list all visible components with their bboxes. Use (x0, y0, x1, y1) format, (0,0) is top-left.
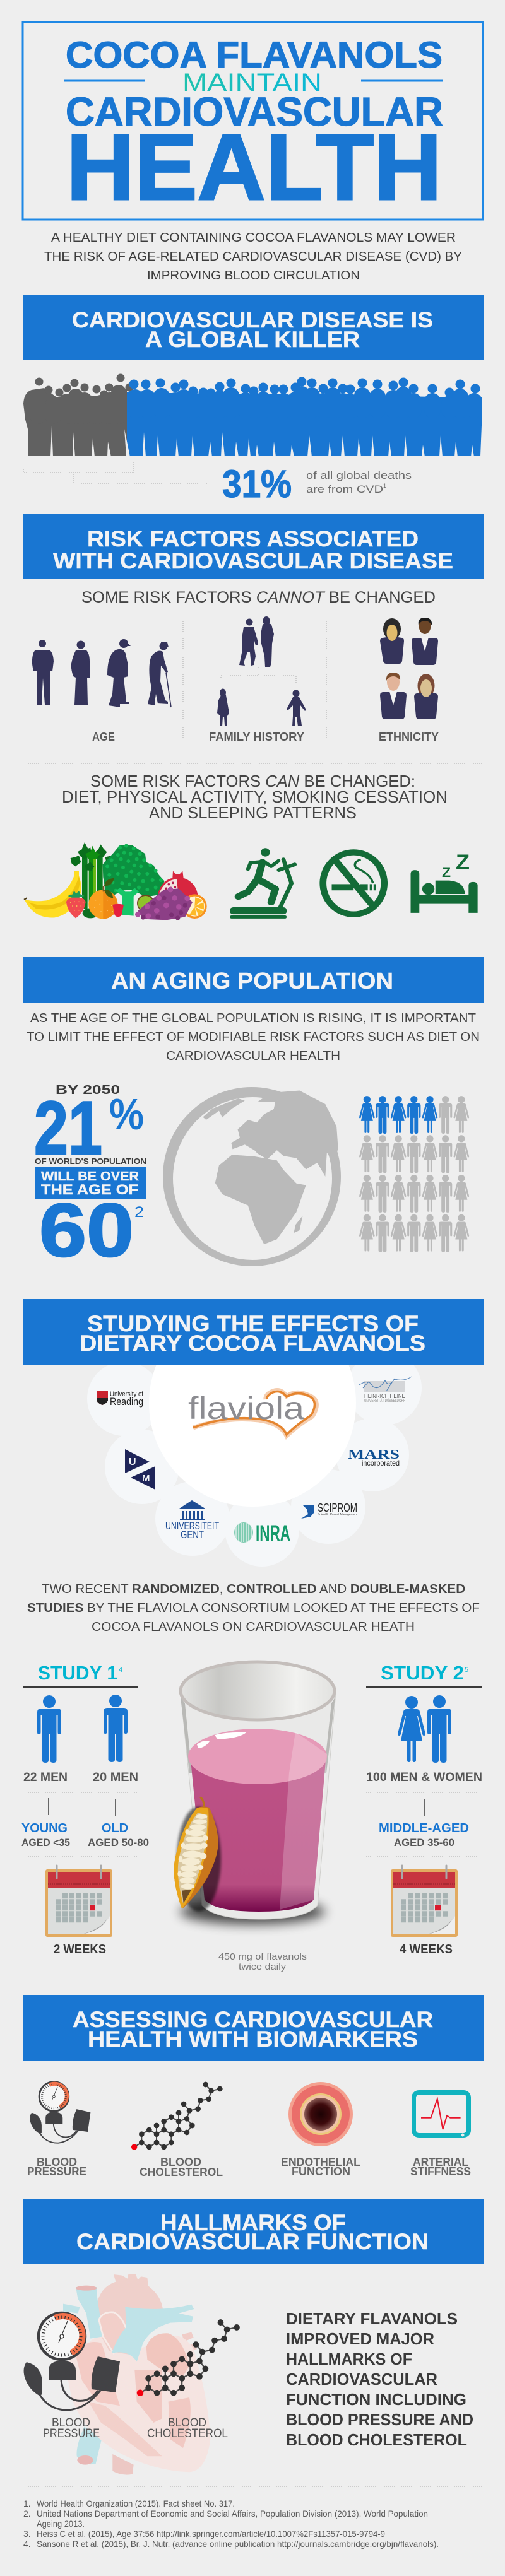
age group: MIDDLE-AGED (379, 1821, 469, 1835)
text: dietary flavanols conclusion (286, 2309, 473, 2449)
label: blood pressure (27, 2156, 86, 2178)
banner: hallmarks: CARDIOVASCULAR FUNCTION (76, 2230, 429, 2254)
icon: heart monitor (414, 2092, 468, 2136)
participant counts (23, 1771, 138, 1784)
logo: mars incorporated: MARS (348, 1447, 400, 1462)
grey people (23, 378, 129, 456)
intro text: THE RISK OF AGE-RELATED CARDIOVASCULAR DISEASE (CVD) BY (44, 250, 462, 264)
icon: calendar (391, 1866, 458, 1937)
age groups: AGED <35 (21, 1837, 70, 1849)
row 4 (359, 1214, 469, 1252)
banner: assessing biomarkers: HEALTH WITH BIOMARKERS (88, 2027, 418, 2052)
age group: AGED 35-60 (394, 1837, 454, 1849)
statistic: by 2050 21 percent over 60: THE AGE OF (41, 1182, 138, 1197)
icon: young adult (32, 640, 54, 705)
banner: studying the effects: DIETARY COCOA FLAVANOLS (80, 1331, 425, 1356)
labels over heart: PRESSURE (43, 2427, 100, 2440)
title line: cocoa flavanols: COCOA FLAVANOLS (66, 35, 443, 76)
studies paragraph: STUDIES BY THE FLAVIOLA CONSORTIUM LOOKED AT THE EFFECTS OF (27, 1601, 480, 1615)
label: arterial stiffness: STIFFNESS (410, 2165, 471, 2178)
logo: maastricht um: U (129, 1457, 136, 1467)
text: dietary flavanols conclusion: BLOOD PRESSURE AND (286, 2410, 473, 2429)
aging paragraph: TO LIMIT THE EFFECT OF MODIFIABLE RISK FACTORS SUCH AS DIET ON (27, 1030, 480, 1044)
panel: age (32, 639, 171, 743)
study 1 heading: 4 (119, 1666, 122, 1674)
references (23, 2498, 439, 2549)
icon: boy (287, 690, 306, 726)
aging paragraph: CARDIOVASCULAR HEALTH (166, 1049, 340, 1063)
label: blood cholesterol: CHOLESTEROL (140, 2166, 223, 2179)
intro text: IMPROVING BLOOD CIRCULATION (147, 269, 360, 283)
text: dietary flavanols conclusion: DIETARY FLAVANOLS (286, 2309, 458, 2328)
title block (23, 22, 483, 220)
label: endothelial function: ENDOTHELIAL (281, 2156, 360, 2168)
label: blood cholesterol: BLOOD (160, 2156, 201, 2168)
studies paragraph: TWO RECENT RANDOMIZED, CONTROLLED AND DOUBLE-MASKED (42, 1582, 465, 1596)
liquid (191, 1760, 326, 1912)
banner: an aging population (23, 957, 484, 1003)
blue people (127, 382, 482, 456)
age groups: AGED 50-80 (88, 1837, 149, 1849)
banner: studying the effects (23, 1299, 484, 1365)
references: 3. (23, 2529, 31, 2539)
heading: cannot be changed: SOME RISK FACTORS CANNOT BE CHANGED (81, 589, 436, 606)
references: Sansone R et al. (2015), Br. J. Nutr. (advance online publication http://journals.cambridge.org/bjn/flavanols). (37, 2539, 439, 2549)
caption: dose: twice daily (239, 1961, 287, 1972)
highlight strip (280, 1732, 327, 1910)
logo: sciprom: Scientific Project Management (318, 1513, 358, 1517)
icon: man with dark skin (412, 618, 438, 665)
icon: woman with brown hair (414, 674, 438, 719)
panel: ethnicity (379, 618, 439, 743)
banner: hallmarks: HALLMARKS OF (160, 2211, 346, 2235)
logo: mars incorporated: incorporated (362, 1459, 400, 1467)
logo: heinrich heine (359, 1377, 412, 1403)
banner: assessing biomarkers (23, 1995, 484, 2061)
logo: university of reading: University of (110, 1391, 144, 1398)
icon: woman and man (398, 1695, 451, 1763)
title frame (23, 22, 483, 220)
label: age: AGE (92, 731, 115, 743)
duration: 2 WEEKS (54, 1943, 106, 1956)
panel: study 1 (21, 1662, 149, 1956)
heading: can be changed: AND SLEEPING PATTERNS (149, 803, 357, 822)
illustration: faded heart (63, 2274, 210, 2475)
study 1 heading: STUDY 1 (38, 1662, 117, 1684)
broccoli (103, 845, 165, 916)
biomarker: blood pressure (27, 2082, 90, 2178)
banner: risk factors (23, 514, 484, 579)
label: endothelial function (281, 2156, 360, 2178)
biomarker: endothelial function (281, 2082, 360, 2178)
logo: sciprom: SCIPROM (318, 1502, 357, 1514)
logo: heinrich heine: UNIVERSITÄT DÜSSELDORF (364, 1399, 405, 1403)
intro text (44, 231, 462, 283)
labels over heart: BLOOD (168, 2416, 206, 2430)
statistic: by 2050 21 percent over 60: 21 (34, 1086, 102, 1170)
statistic: by 2050 21 percent over 60: 2 (134, 1204, 144, 1221)
glass interior (181, 1662, 335, 1720)
banner: assessing biomarkers: ASSESSING CARDIOVASCULAR (73, 2008, 433, 2032)
gaps between legs (23, 416, 474, 457)
heading: can be changed (62, 772, 448, 822)
pictogram: 5 in 28 people highlighted (359, 1096, 469, 1252)
title line: maintain: MAINTAIN (182, 69, 322, 97)
logo: maastricht um: M (142, 1473, 150, 1484)
icon: girl (217, 689, 229, 726)
label: arterial stiffness (410, 2156, 471, 2178)
icon: 22 men (37, 1695, 61, 1763)
study 2 heading: 5 (465, 1666, 468, 1674)
text: dietary flavanols conclusion: FUNCTION INCLUDING (286, 2390, 466, 2409)
study 2 heading: STUDY 2 (381, 1662, 464, 1684)
banner: studying the effects: STUDYING THE EFFECTS OF (87, 1312, 419, 1336)
logo: inra: INRA (256, 1521, 290, 1546)
icon: blood pressure cuff (30, 2082, 90, 2143)
grapes (138, 888, 193, 920)
icon: blood pressure cuff over heart (24, 2313, 120, 2410)
age group (379, 1821, 469, 1849)
text: dietary flavanols conclusion: BLOOD CHOLESTEROL (286, 2430, 467, 2449)
row 2 (359, 1135, 469, 1173)
logo: sciprom (301, 1502, 358, 1519)
icon: father (239, 618, 258, 666)
strawberry and leaves (66, 891, 98, 918)
logo: heinrich heine: HEINRICH HEINE (364, 1393, 405, 1400)
age groups: OLD (102, 1821, 128, 1835)
label: ethnicity: ETHNICITY (379, 731, 439, 743)
heading: can be changed: SOME RISK FACTORS CAN BE CHANGED: (90, 772, 415, 791)
labels over heart: BLOOD (52, 2416, 90, 2430)
consortium partner circles (87, 1300, 422, 1567)
icon: artery cross section (288, 2082, 353, 2146)
icon: sleeping in bed (411, 850, 478, 913)
aging paragraph (27, 1011, 480, 1063)
illustration: glass of cocoa flavanol drink (174, 1662, 336, 1924)
icon: elderly adult with cane (148, 642, 171, 707)
icon: mother (261, 616, 274, 667)
icon: sleeping in bed: Z (442, 866, 451, 880)
logo: flaviola: flaviola (188, 1391, 304, 1426)
references: United Nations Department of Economic and Social Affairs, Population Division (2013). World Population (37, 2508, 428, 2519)
statistic: 31 percent of global deaths: are from CVD (306, 483, 383, 495)
label: blood pressure: BLOOD (37, 2156, 77, 2168)
icon: treadmill runner (230, 848, 295, 919)
references: 2. (23, 2508, 31, 2519)
banana (23, 871, 81, 917)
statistic: by 2050 21 percent over 60: BY 2050 (56, 1083, 120, 1097)
raspberry (112, 904, 124, 917)
age groups (21, 1821, 149, 1849)
icon: calendar (45, 1866, 112, 1937)
logo: university of reading (97, 1391, 144, 1408)
icon: older adult (107, 639, 131, 707)
orange with leaves (88, 878, 117, 919)
icon: middle aged adult (71, 641, 90, 705)
statistic: by 2050 21 percent over 60: 60 (39, 1188, 134, 1273)
crowd silhouette: 31 percent highlighted (23, 378, 482, 457)
references: 1. (23, 2498, 31, 2508)
banner: cardiovascular disease is a global killer: CARDIOVASCULAR DISEASE IS (72, 308, 433, 332)
statistic: 31 percent of global deaths: 1 (383, 483, 386, 489)
icon: cholesterol molecule over heart (137, 2322, 237, 2396)
participant counts: 22 MEN (23, 1771, 68, 1784)
logo: universiteit gent: UNIVERSITEIT (165, 1520, 219, 1532)
banner: cardiovascular disease is a global killer: A GLOBAL KILLER (145, 327, 360, 352)
dotted connector to statistic (23, 462, 208, 483)
icon: 20 men (104, 1695, 128, 1762)
banner: risk factors: RISK FACTORS ASSOCIATED (87, 527, 419, 551)
text: dietary flavanols conclusion: HALLMARKS OF (286, 2350, 412, 2368)
label: blood cholesterol (140, 2156, 223, 2179)
banner: cardiovascular disease is a global killer (23, 295, 484, 360)
cocoa pod (174, 1797, 221, 1912)
statistic: by 2050 21 percent over 60: OF WORLD'S POPULATION (35, 1156, 146, 1166)
intro text: A HEALTHY DIET CONTAINING COCOA FLAVANOLS MAY LOWER (51, 231, 456, 245)
caption: dose: 450 mg of flavanols (218, 1951, 307, 1962)
row 1 (359, 1096, 469, 1134)
logo: university of reading: Reading (110, 1396, 143, 1408)
label: endothelial function: FUNCTION (292, 2165, 350, 2178)
participant counts: 20 MEN (93, 1771, 138, 1784)
statistic: 31 percent of global deaths (222, 462, 412, 505)
duration: 4 WEEKS (400, 1943, 453, 1956)
statistic: by 2050 21 percent over 60: % (109, 1090, 144, 1139)
logo: universiteit gent: GENT (181, 1529, 204, 1541)
icon: cholesterol molecule (131, 2085, 220, 2150)
title line: cardiovascular: CARDIOVASCULAR (66, 89, 443, 134)
banner: an aging population: AN AGING POPULATION (111, 968, 393, 994)
statistic: 31 percent of global deaths: of all global deaths (306, 469, 412, 481)
icon: sleeping in bed: Z (456, 850, 470, 874)
drop shadow (180, 1899, 325, 1924)
studies paragraph (27, 1582, 480, 1634)
title line: health: HEALTH (66, 114, 442, 220)
banner: risk factors: WITH CARDIOVASCULAR DISEASE (53, 549, 453, 573)
panel: study 2 (366, 1662, 482, 1956)
biomarker: blood cholesterol (131, 2085, 223, 2179)
studies paragraph: COCOA FLAVANOLS ON CARDIOVASCULAR HEATH (92, 1620, 415, 1634)
orange slice (182, 894, 207, 919)
label: arterial stiffness: ARTERIAL (413, 2156, 468, 2168)
references: Heiss C et al. (2015), Age 37:56 http://link.springer.com/article/10.1007%2Fs11357-015-9794-9 (37, 2529, 385, 2539)
labels over heart (43, 2416, 228, 2440)
participant count: 100 MEN & WOMEN (366, 1771, 482, 1784)
row 3 (359, 1175, 469, 1213)
statistic: 31 percent of global deaths: 31% (222, 462, 292, 505)
logo: mars incorporated (348, 1447, 400, 1467)
glass body (181, 1692, 336, 1919)
biomarker: arterial stiffness (410, 2092, 471, 2178)
kiwi (137, 895, 154, 912)
logo: inra (234, 1521, 290, 1546)
heading: can be changed: DIET, PHYSICAL ACTIVITY, SMOKING CESSATION (62, 787, 448, 806)
celery (71, 842, 115, 909)
pomegranate (158, 871, 198, 909)
panel: family history (209, 616, 306, 743)
caption: dose (218, 1951, 307, 1972)
statistic: by 2050 21 percent over 60: WILL BE OVER (41, 1170, 140, 1184)
references: 4. (23, 2539, 31, 2549)
age groups: YOUNG (21, 1821, 68, 1835)
icon: globe (163, 1087, 341, 1266)
label: blood pressure: PRESSURE (27, 2165, 86, 2178)
icon: fruit and vegetables (23, 842, 207, 920)
labels over heart: CHOLESTEROL (147, 2427, 228, 2440)
icon: no smoking (323, 852, 384, 914)
statistic: by 2050 21 percent over 60 (34, 1083, 146, 1273)
logo: maastricht um (125, 1449, 155, 1490)
banner: hallmarks (23, 2199, 484, 2264)
aging paragraph: AS THE AGE OF THE GLOBAL POPULATION IS RISING, IT IS IMPORTANT (30, 1011, 476, 1025)
label: family history: FAMILY HISTORY (209, 731, 304, 743)
icon: man with light skin (380, 673, 407, 719)
icon: woman with black hair (380, 618, 404, 664)
logo: universiteit gent (165, 1500, 219, 1541)
text: dietary flavanols conclusion: IMPROVED MAJOR (286, 2329, 434, 2348)
references: World Health Organization (2015). Fact sheet No. 317. (37, 2498, 235, 2508)
text: dietary flavanols conclusion: CARDIOVASCULAR (286, 2370, 437, 2389)
logo: flaviola (188, 1391, 316, 1436)
references: Ageing 2013. (37, 2519, 85, 2529)
